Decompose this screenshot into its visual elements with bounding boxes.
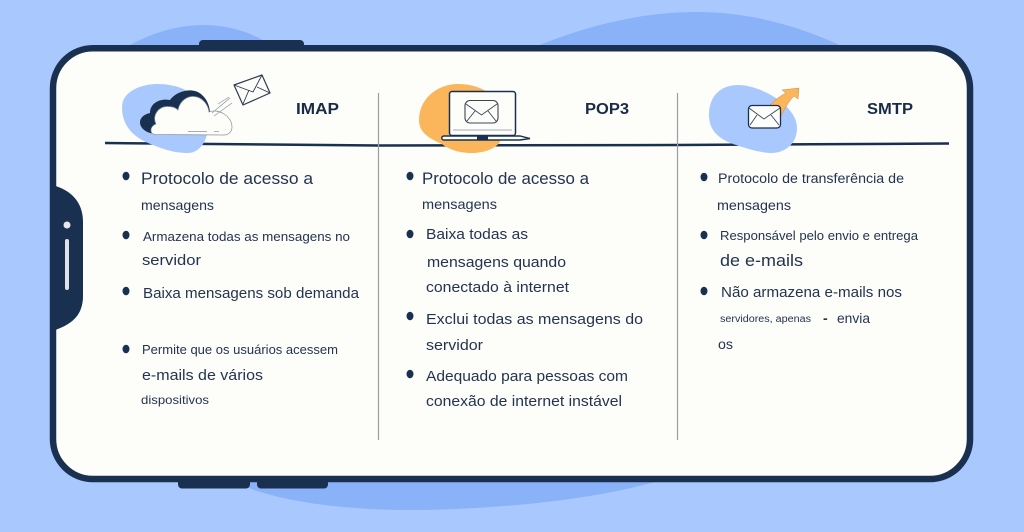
bullet list: IMAP: Protocolo de acesso a bbox=[141, 169, 314, 188]
bullet list: POP3: servidor bbox=[426, 337, 483, 354]
bullet list: POP3: Baixa todas as bbox=[426, 226, 528, 243]
bullet list: POP3: Protocolo de acesso a bbox=[422, 170, 590, 188]
heading: SMTP: SMTP bbox=[867, 101, 913, 118]
bullet list: IMAP: dispositivos bbox=[141, 393, 209, 407]
bullet list: IMAP: mensagens bbox=[141, 197, 214, 213]
panel: POP3 bbox=[406, 84, 643, 410]
bullet list: SMTP: Não armazena e-mails nos bbox=[721, 284, 902, 301]
column dividers bbox=[378, 93, 678, 440]
phone side notch bbox=[52, 185, 83, 331]
bullet list: POP3 bbox=[406, 170, 643, 410]
bullet list: POP3: mensagens quando bbox=[427, 254, 566, 271]
bullet list: POP3: Exclui todas as mensagens do bbox=[426, 311, 643, 328]
bullet list: SMTP: mensagens bbox=[717, 197, 791, 213]
header divider bbox=[105, 143, 949, 146]
bullet list: POP3: Adequado para pessoas com bbox=[426, 368, 628, 385]
bullet list: IMAP: Permite que os usuários acessem bbox=[142, 343, 338, 357]
background blobs bbox=[125, 12, 846, 510]
panel: SMTP bbox=[700, 85, 918, 352]
icon: envelope with arrow bbox=[709, 85, 799, 153]
icon: cloud with envelope bbox=[122, 75, 270, 153]
bullet list: SMTP: envia bbox=[837, 310, 870, 326]
bullet list: SMTP: os bbox=[718, 336, 733, 352]
bullet list: IMAP: servidor bbox=[142, 252, 201, 269]
bullet list: SMTP: Responsável pelo envio e entrega bbox=[720, 229, 918, 243]
bullet list: IMAP: e-mails de vários bbox=[142, 367, 263, 384]
bullet list: POP3: mensagens bbox=[422, 196, 497, 212]
icon: laptop with envelope bbox=[419, 84, 530, 153]
heading: POP3: POP3 bbox=[585, 101, 629, 118]
bottom phone buttons bbox=[178, 474, 328, 488]
panel: IMAP bbox=[122, 75, 360, 407]
bullet list: POP3: conexão de internet instável bbox=[426, 393, 622, 410]
bullet list: SMTP: - bbox=[823, 310, 828, 326]
bullet list: SMTP: servidores, apenas bbox=[720, 314, 811, 325]
bullet list: SMTP: de e-mails bbox=[720, 252, 803, 270]
bullet list: IMAP bbox=[122, 169, 360, 407]
phone frame bbox=[53, 48, 970, 479]
bullet list: SMTP bbox=[700, 171, 918, 352]
heading: IMAP: IMAP bbox=[296, 101, 339, 118]
bullet list: IMAP: Baixa mensagens sob demanda bbox=[143, 285, 360, 302]
bullet list: POP3: conectado à internet bbox=[426, 279, 570, 296]
bullet list: IMAP: Armazena todas as mensagens no bbox=[143, 229, 350, 244]
top phone button bbox=[199, 40, 304, 52]
bullet list: SMTP: Protocolo de transferência de bbox=[718, 171, 904, 186]
